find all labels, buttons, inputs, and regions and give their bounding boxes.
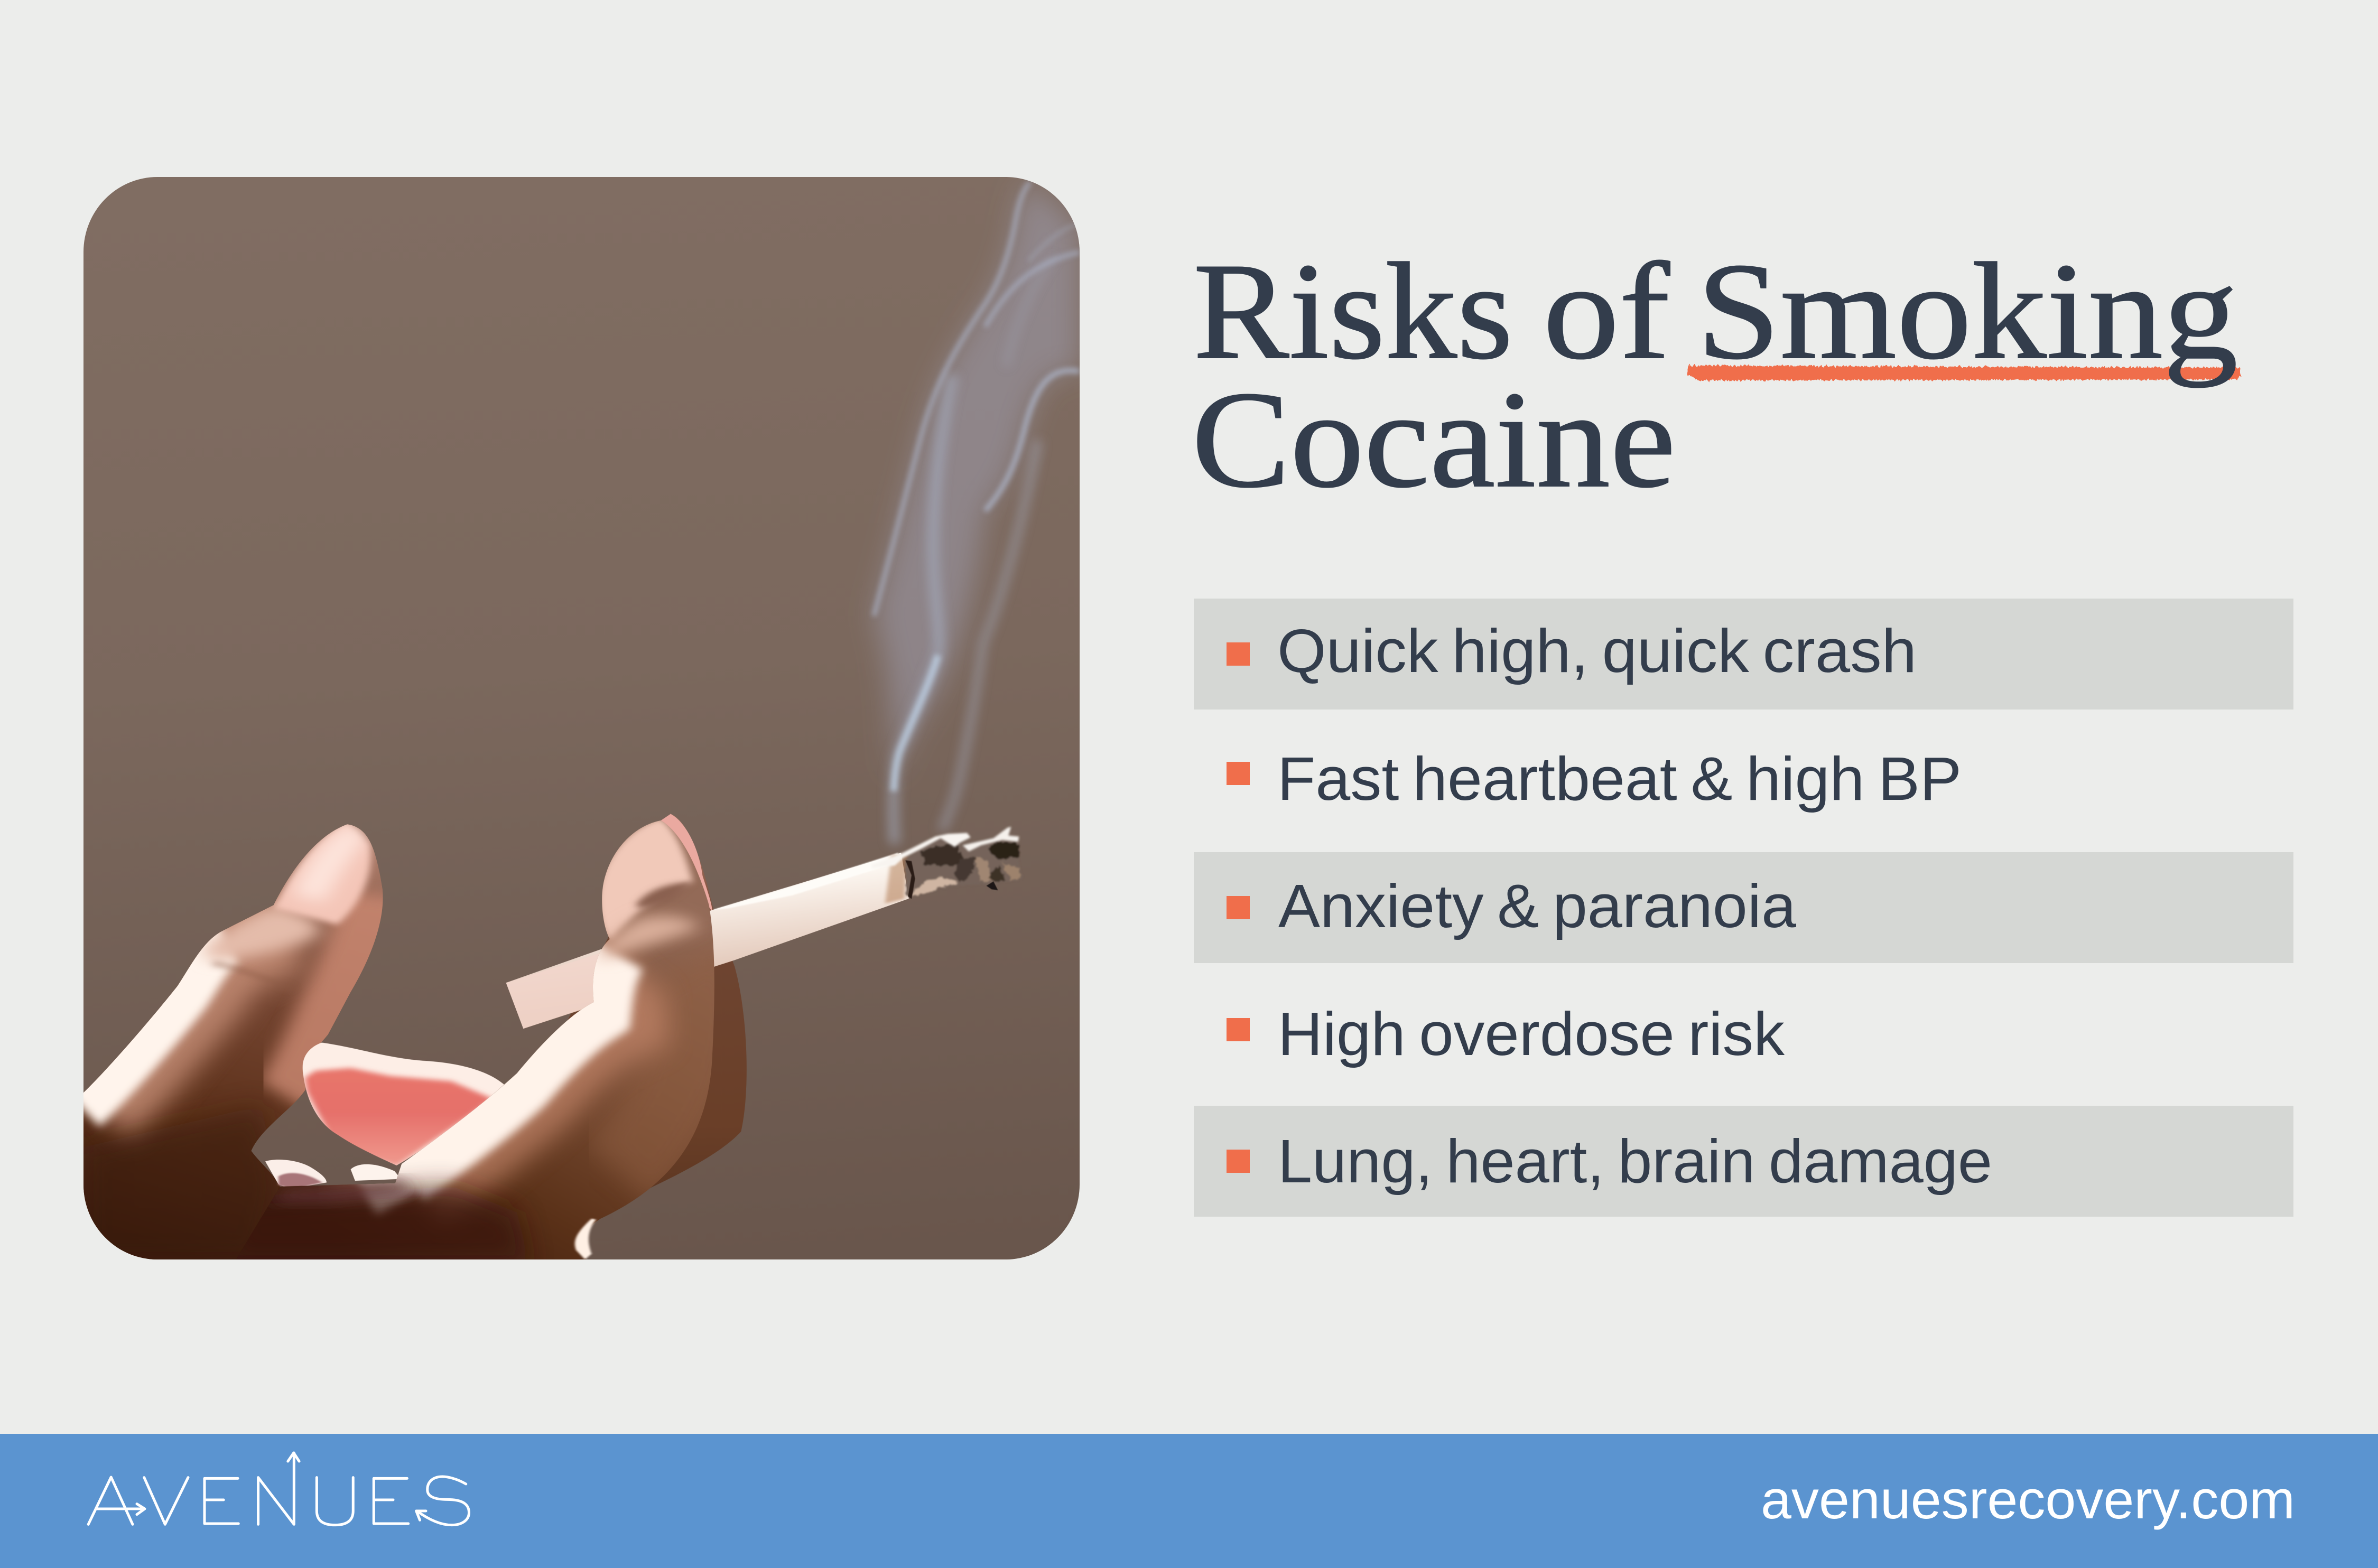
knuckle crease bbox=[213, 963, 293, 989]
nail pad of left finger bbox=[274, 821, 371, 925]
lower dark shading bbox=[81, 1106, 280, 1264]
row: High overdose risk: High overdose risk bbox=[1278, 1000, 1785, 1068]
salmon shaded right edge of left finger bbox=[290, 895, 376, 1099]
upper pad of front finger bbox=[597, 818, 693, 941]
lit edge of left finger bbox=[75, 931, 222, 1101]
small finger tips bbox=[265, 1160, 401, 1189]
bright sliver at wrist bbox=[575, 1219, 596, 1259]
row: Quick high, quick crash: Quick high, quick crash bbox=[1277, 617, 1917, 685]
heading line 2: Cocaine bbox=[1192, 363, 1676, 516]
burning ash tip bbox=[872, 827, 1021, 899]
ring finger bbox=[286, 1038, 517, 1170]
palm shadow bbox=[222, 1187, 530, 1264]
warm halo beside left finger's lit edge bbox=[83, 905, 280, 1093]
left finger bbox=[83, 824, 383, 1261]
back finger bbox=[453, 814, 747, 1261]
list of risks bbox=[1194, 599, 2293, 1217]
ring finger pink pad bbox=[305, 1068, 493, 1166]
heading word: Smoking: Smoking bbox=[1697, 235, 2238, 388]
warm side of front finger bbox=[619, 967, 695, 1173]
row: Lung, heart, brain damage bbox=[1194, 1106, 2293, 1217]
cigarette bbox=[506, 853, 909, 1029]
knuckle highlight bbox=[204, 905, 320, 960]
mauve inner palm bbox=[274, 1180, 414, 1202]
lit edge of front finger bbox=[398, 947, 605, 1193]
orange brush underline bbox=[1687, 366, 2242, 380]
row: Quick high, quick crash bbox=[1194, 599, 2293, 710]
heading word: Risks: Risks bbox=[1193, 235, 1513, 388]
smoke plume bbox=[874, 182, 1080, 844]
row: Anxiety & paranoia: Anxiety & paranoia bbox=[1278, 872, 1796, 940]
row: Anxiety & paranoia bbox=[1194, 852, 2293, 963]
hand and cigarette bbox=[75, 814, 909, 1264]
footer bar bbox=[0, 1434, 2378, 1568]
heading word: of: of bbox=[1543, 235, 1671, 388]
warm halo beside front finger's lit edge bbox=[402, 939, 610, 1193]
row: Lung, heart, brain damage: Lung, heart, brain damage bbox=[1278, 1127, 1992, 1196]
panel: photo of hand holding a smoking cigarette bbox=[75, 177, 1080, 1264]
heading: Risks of Smoking Cocaine bbox=[1192, 235, 2242, 516]
logo: AVENUES with arrows bbox=[88, 1453, 469, 1525]
row: Fast heartbeat & high BP: Fast heartbeat & high BP bbox=[1277, 744, 1962, 813]
website url: avenuesrecovery.com bbox=[1761, 1469, 2295, 1530]
front finger bbox=[235, 820, 714, 1261]
